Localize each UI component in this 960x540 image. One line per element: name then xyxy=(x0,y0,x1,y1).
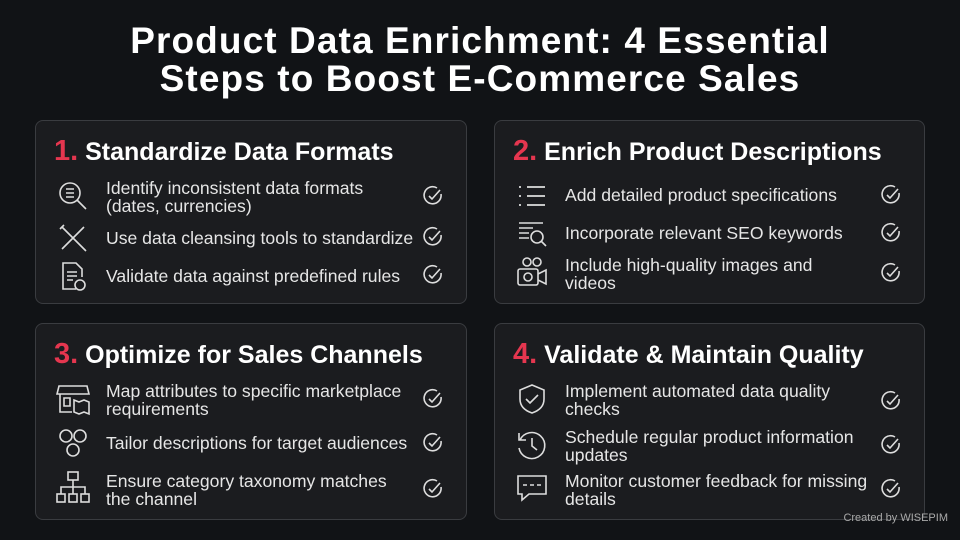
item 4.2: updates xyxy=(565,445,628,465)
item 4.1: Implement automated data quality xyxy=(565,381,830,401)
item 4.1: checks xyxy=(565,399,620,419)
item 3.2: Tailor descriptions for target audiences xyxy=(106,433,407,453)
item 4.2 xyxy=(518,427,900,465)
item 2.3: Include high-quality images and xyxy=(565,255,812,275)
item 3.1 xyxy=(56,381,442,419)
footer credit: Created by WISEPIM xyxy=(843,512,948,524)
item 3.1: requirements xyxy=(106,399,209,419)
item 1.1: (dates, currencies) xyxy=(106,196,252,216)
item 1.3: Validate data against predefined rules xyxy=(106,266,400,286)
item 3.3 xyxy=(56,471,442,509)
title: Steps to Boost E-Commerce Sales xyxy=(160,58,800,99)
item 1.3 xyxy=(62,262,442,291)
item 4.2: Schedule regular product information xyxy=(565,427,854,447)
panel: enrich xyxy=(494,120,925,304)
item 1.2 xyxy=(60,224,442,252)
item 3.3: the channel xyxy=(106,489,197,509)
item 2.3 xyxy=(517,255,900,293)
heading 4: 4. Validate & Maintain Quality xyxy=(513,338,864,370)
item 2.2: Incorporate relevant SEO keywords xyxy=(565,223,843,243)
item 2.1 xyxy=(519,184,900,206)
item 3.1: Map attributes to specific marketplace xyxy=(106,381,401,401)
item 2.2 xyxy=(519,222,900,247)
panel: optimize xyxy=(35,323,467,520)
heading 1: 1. Standardize Data Formats xyxy=(54,135,394,167)
item 1.1: Identify inconsistent data formats xyxy=(106,178,363,198)
title: Product Data Enrichment: 4 Essential xyxy=(130,20,830,61)
item 4.1 xyxy=(519,381,900,419)
panel: standardize xyxy=(35,120,467,304)
heading 3: 3. Optimize for Sales Channels xyxy=(54,338,423,370)
heading 2: 2. Enrich Product Descriptions xyxy=(513,135,882,167)
panel: validate xyxy=(494,323,925,520)
item 2.3: videos xyxy=(565,273,616,293)
item 1.1 xyxy=(59,178,442,216)
title xyxy=(130,20,830,99)
item 4.3: Monitor customer feedback for missing xyxy=(565,471,867,491)
item 4.3 xyxy=(517,471,900,509)
item 3.2 xyxy=(59,429,442,457)
item 2.1: Add detailed product specifications xyxy=(565,185,837,205)
item 3.3: Ensure category taxonomy matches xyxy=(106,471,387,491)
item 1.2: Use data cleansing tools to standardize xyxy=(106,228,413,248)
item 4.3: details xyxy=(565,489,616,509)
